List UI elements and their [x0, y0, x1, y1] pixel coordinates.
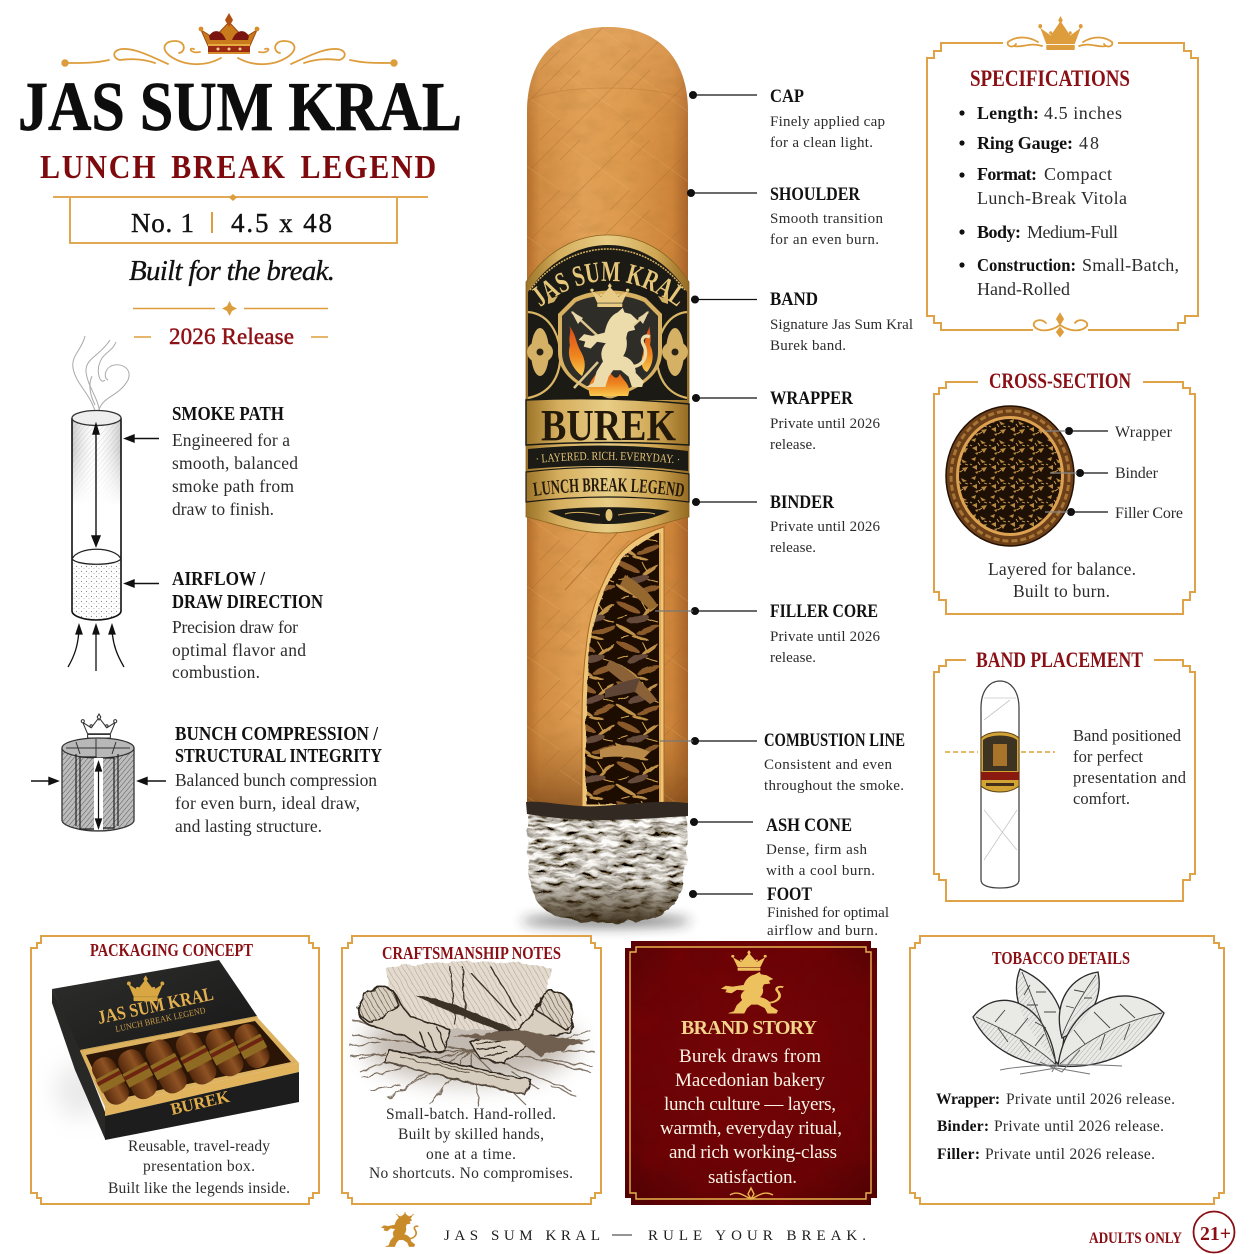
bottom flourish: [1034, 314, 1087, 336]
text: bunch compression: [175, 723, 382, 836]
spec list: Small-Batch,: [1082, 255, 1179, 275]
vertical draw arrow: [92, 424, 100, 546]
cigar box: JAS SUM KRAL: [96, 984, 215, 1029]
flames: [589, 366, 629, 396]
caption: Built like the legends inside.: [108, 1180, 290, 1197]
tobacco leaves: [973, 969, 1164, 1074]
rampant lion: [579, 309, 650, 387]
spec plate: [53, 194, 428, 243]
tobacco list: Private until 2026 release.: [1006, 1091, 1175, 1108]
callout: band: Burek band.: [770, 338, 846, 354]
dashed placement line: [945, 751, 1055, 753]
caption: one at a time.: [426, 1146, 516, 1163]
arrow: airflow pointer: [125, 580, 159, 587]
crown flourishes: [1008, 38, 1112, 46]
callout: foot: [767, 884, 889, 939]
callout: combustion line: COMBUSTION LINE: [764, 730, 905, 751]
callout: band: Signature Jas Sum Kral: [770, 317, 913, 333]
divider dash: [612, 1234, 632, 1236]
heading: CROSS-SECTION: [989, 368, 1131, 393]
spec list: Construction:: [977, 255, 1076, 275]
callout: ash cone: [766, 815, 875, 879]
heading: TOBACCO DETAILS: [992, 948, 1130, 968]
callout: combustion line: Consistent and even: [764, 757, 892, 773]
spec list: Length:: [977, 103, 1039, 123]
cigar band: BUREK: [541, 401, 676, 450]
release ornament: [133, 301, 328, 349]
cigar band: [525, 234, 690, 534]
callout: shoulder: SHOULDER: [770, 184, 860, 205]
callout: shoulder: [770, 184, 884, 248]
boxed cigars: [87, 1020, 274, 1109]
callout: shoulder: for an even burn.: [770, 232, 879, 248]
tobacco list: Filler:: [937, 1146, 980, 1163]
panel: band placement: [934, 647, 1195, 901]
text: smoke path: Engineered for a: [172, 430, 290, 450]
callout: foot: airflow and burn.: [767, 923, 878, 939]
story text: warmth, everyday ritual,: [660, 1118, 842, 1139]
callout: filler core: [770, 601, 880, 666]
text: smoke path: SMOKE PATH: [172, 403, 284, 425]
tobacco list: Private until 2026 release.: [985, 1146, 1155, 1163]
age badge: 21+: [1200, 1223, 1231, 1245]
story text: Burek draws from: [679, 1046, 821, 1067]
spec plate: 4.5 x 48: [231, 208, 332, 238]
text: smoke path: draw to finish.: [172, 499, 274, 519]
box lid print: [127, 976, 164, 1001]
band placement note: presentation and: [1073, 768, 1187, 787]
icon: gold crown: [1038, 16, 1083, 50]
caption: [108, 1138, 290, 1197]
story text: Macedonian bakery: [675, 1070, 826, 1091]
brand line: JAS SUM KRAL: [444, 1228, 600, 1244]
callout: binder: release.: [770, 540, 816, 556]
spec list: Medium-Full: [1027, 222, 1118, 242]
BUREK panel: [526, 399, 689, 445]
band placement note: comfort.: [1073, 789, 1130, 808]
callout: ash cone: ASH CONE: [766, 815, 852, 836]
cross-section disc: [946, 406, 1074, 546]
cigar illustration: [481, 27, 694, 966]
cigar box: LUNCH BREAK LEGEND: [114, 1005, 207, 1034]
age badge: [1194, 1212, 1234, 1252]
spec list: Hand-Rolled: [977, 279, 1070, 299]
cigar box: BUREK: [169, 1087, 232, 1119]
cross-section labels: Filler Core: [1115, 505, 1183, 522]
tobacco list: Wrapper:: [936, 1091, 1000, 1108]
caption: [369, 1106, 573, 1182]
spec list: [959, 103, 1179, 299]
band crown: [590, 283, 629, 307]
bottom flourish: [730, 1188, 773, 1199]
callout: binder: BINDER: [770, 492, 834, 513]
side medallions: [528, 312, 687, 398]
story text: lunch culture — layers,: [664, 1094, 836, 1115]
callout: band: BAND: [770, 289, 818, 310]
band placement note: Band positioned: [1073, 726, 1182, 745]
callout: filler core: FILLER CORE: [770, 601, 878, 622]
cross-section labels: [1115, 424, 1183, 522]
story text: and rich working-class: [669, 1142, 837, 1163]
text: bunch compression: for even burn, ideal draw,: [175, 793, 360, 813]
filler core cut-out: [582, 527, 664, 808]
subtitle: LUNCH BREAK LEGEND: [40, 149, 438, 186]
callout: foot: FOOT: [767, 884, 812, 905]
cross-section leaders: [1045, 428, 1108, 515]
tobacco list: Private until 2026 release.: [994, 1118, 1164, 1135]
icon: royal crown: [199, 13, 259, 54]
text: airflow: AIRFLOW /: [172, 568, 265, 590]
arrow: smoke path pointer: [125, 435, 159, 442]
callout: shoulder: Smooth transition: [770, 211, 884, 227]
story text: [660, 1046, 842, 1188]
adults-only label: ADULTS ONLY: [1089, 1230, 1182, 1247]
text: bunch compression: STRUCTURAL INTEGRITY: [175, 745, 382, 767]
cross-section labels: Binder: [1115, 465, 1159, 482]
text: bunch compression: Balanced bunch compression: [175, 770, 377, 790]
panel: packaging concept: [31, 936, 319, 1204]
tobacco list: Binder:: [937, 1118, 989, 1135]
text: airflow: Precision draw for: [172, 617, 298, 637]
text: airflow: optimal flavor and: [172, 640, 306, 660]
heading: CRAFTSMANSHIP NOTES: [382, 943, 561, 963]
burn line: [526, 802, 688, 820]
callout leaders: [655, 92, 757, 897]
cross-section labels: Wrapper: [1115, 424, 1173, 441]
panel: brand story: [625, 941, 878, 1205]
text: bunch compression: and lasting structure.: [175, 816, 322, 836]
cigar box: [52, 960, 299, 1140]
callout: wrapper: WRAPPER: [770, 388, 853, 409]
spec list: Compact: [1044, 164, 1112, 184]
spec plate: No. 1: [131, 208, 194, 238]
ground shadow: [521, 915, 691, 927]
torso: [385, 962, 552, 1030]
airflow arrows: [68, 625, 124, 671]
slogan: RULE YOUR BREAK.: [648, 1228, 866, 1244]
tobacco list: [936, 1091, 1175, 1163]
callout: wrapper: Private until 2026: [770, 416, 880, 432]
release ornament: 2026 Release: [169, 324, 294, 349]
illustration: bunch compression: [62, 714, 134, 831]
header block: [18, 13, 462, 349]
spec list: Format:: [977, 164, 1037, 184]
right arm: [470, 991, 573, 1064]
callout: cap: CAP: [770, 86, 804, 107]
spec list: 4.5 inches: [1044, 103, 1122, 123]
caption: Reusable, travel-ready: [128, 1138, 270, 1155]
callout: cap: [770, 86, 885, 151]
title: JAS SUM KRAL: [18, 69, 462, 146]
smoke curls: [73, 336, 129, 415]
cross-section caption: Layered for balance.: [988, 559, 1136, 579]
caption: Built by skilled hands,: [398, 1126, 544, 1143]
text: bunch compression: BUNCH COMPRESSION /: [175, 723, 378, 745]
mini band: [981, 732, 1019, 792]
callout: band: [770, 289, 913, 354]
mini cigar outline: [981, 681, 1019, 888]
top filigree ornament: [62, 41, 397, 66]
callout: combustion line: [764, 730, 905, 794]
cigar band: · LAYERED. RICH. EVERYDAY. ·: [536, 452, 680, 464]
gold lion emblem: [722, 950, 783, 1013]
spears: [572, 312, 648, 388]
central shield: [558, 290, 662, 399]
footer: [381, 1212, 1234, 1252]
cigar band: LUNCH BREAK LEGEND: [532, 478, 684, 496]
band placement note: [1073, 726, 1187, 808]
cross-section caption: Built to burn.: [1013, 581, 1110, 601]
callout: ash cone: Dense, firm ash: [766, 842, 868, 858]
mini crown: [81, 714, 117, 738]
legend strip: [534, 491, 683, 497]
caption: No shortcuts. No compromises.: [369, 1165, 573, 1182]
callout: cap: for a clean light.: [770, 135, 873, 151]
callout: combustion line: throughout the smoke.: [764, 778, 904, 794]
cigar body: [527, 27, 688, 817]
sketch: hands rolling tobacco: [350, 962, 595, 1108]
cross-section caption: [988, 559, 1136, 601]
illustration: smoke path tube: [68, 336, 129, 671]
callout: binder: Private until 2026: [770, 519, 880, 535]
callout: wrapper: [770, 388, 880, 453]
radiating strokes: [350, 1020, 595, 1108]
heading: BAND PLACEMENT: [976, 647, 1143, 672]
callout: ash cone: with a cool burn.: [766, 863, 875, 879]
ash cone: [525, 806, 690, 926]
heading: PACKAGING CONCEPT: [90, 940, 253, 960]
callout: filler core: release.: [770, 650, 816, 666]
text: airflow: [172, 568, 323, 682]
panel: specifications: [927, 16, 1198, 336]
story text: satisfaction.: [708, 1167, 797, 1188]
caption: Small-batch. Hand-rolled.: [386, 1106, 556, 1123]
callout: cap: Finely applied cap: [770, 114, 885, 130]
text: smoke path: smoke path from: [172, 476, 294, 496]
panel: tobacco details: [910, 936, 1224, 1204]
left arm: [357, 987, 450, 1052]
band placement note: for perfect: [1073, 747, 1143, 766]
callout: wrapper: release.: [770, 437, 816, 453]
callout: binder: [770, 492, 880, 556]
spec list: Body:: [977, 222, 1021, 242]
caption: presentation box.: [143, 1158, 255, 1175]
tagline: Built for the break.: [129, 255, 335, 287]
text: smoke path: smooth, balanced: [172, 453, 298, 473]
cigar band: JAS SUM KRAL: [532, 262, 684, 306]
arrows: compression: [31, 778, 166, 784]
plank: [384, 1050, 531, 1095]
panel: cross-section: [934, 368, 1195, 614]
callout: filler core: Private until 2026: [770, 629, 880, 645]
spec list: Lunch-Break Vitola: [977, 188, 1127, 208]
heading: BRAND STORY: [681, 1017, 818, 1039]
motto strip: [528, 445, 688, 471]
text: airflow: DRAW DIRECTION: [172, 591, 323, 613]
text: airflow: combustion.: [172, 662, 260, 682]
callouts: cigar anatomy: [655, 86, 913, 939]
spec list: 48: [1079, 133, 1099, 153]
text: smoke path: [172, 403, 298, 519]
icon: footer lion: [381, 1212, 418, 1247]
heading: SPECIFICATIONS: [970, 66, 1130, 91]
tobacco leaf bundle: [414, 994, 520, 1034]
spec list: Ring Gauge:: [977, 133, 1073, 153]
panel: craftsmanship notes: [342, 936, 601, 1204]
callout: foot: Finished for optimal: [767, 905, 889, 921]
